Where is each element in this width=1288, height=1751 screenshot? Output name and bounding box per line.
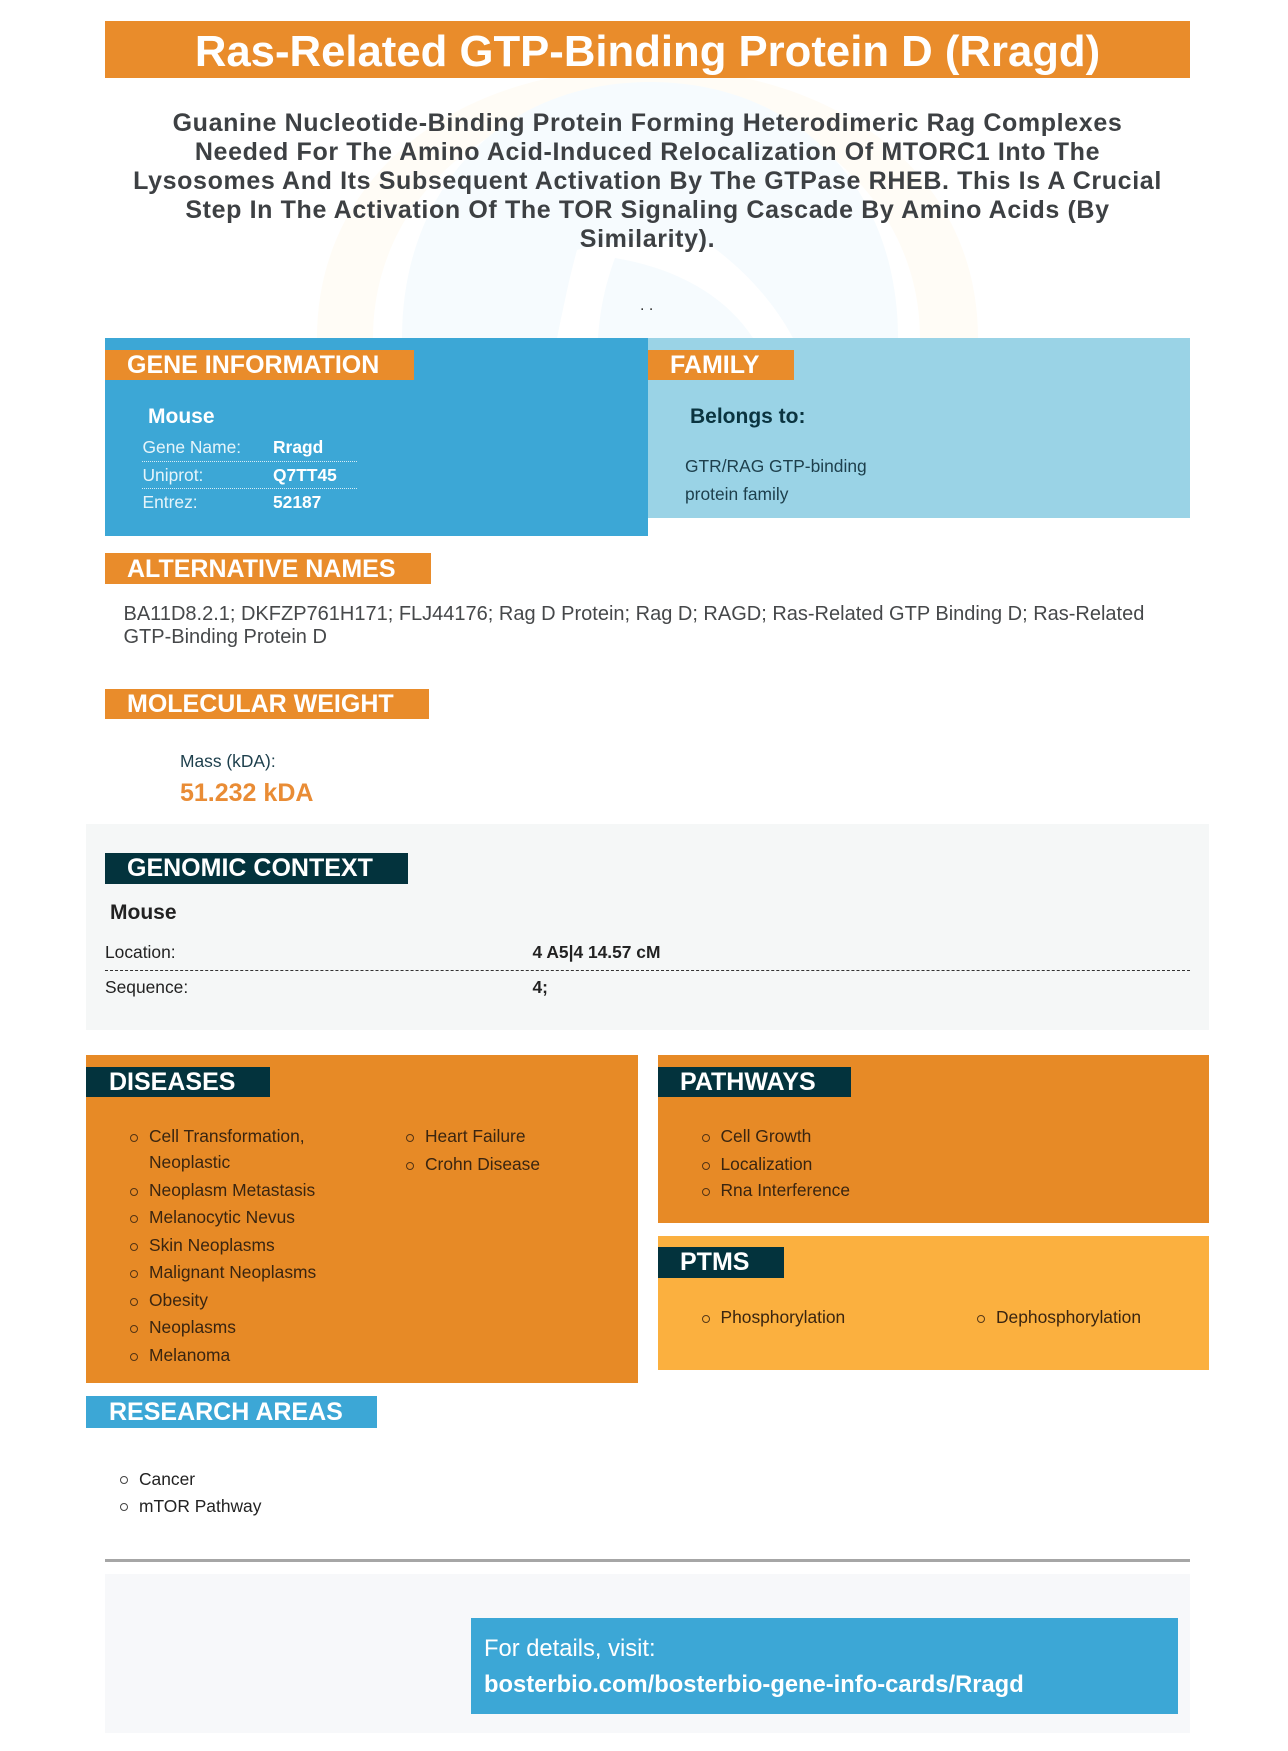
heading: diseases: DISEASES — [109, 1068, 235, 1096]
label: Uniprot: — [142, 465, 203, 485]
list item: Heart Failure — [425, 1126, 526, 1146]
belongs to label: Belongs to: — [690, 405, 806, 428]
subtitle description: Lysosomes And Its Subsequent Activation By The GTPase RHEB. This Is A Crucial — [133, 167, 1162, 195]
panel: genomic context — [86, 824, 1209, 1030]
panel: ptms — [658, 1236, 1209, 1370]
row: sequence — [105, 977, 548, 997]
ptm item: dephosphorylation: Dephosphorylation — [996, 1307, 1141, 1327]
heading: ptms — [658, 1247, 784, 1278]
list item: Skin Neoplasms — [149, 1235, 275, 1255]
family description — [685, 456, 867, 504]
list item: Cell Transformation, — [149, 1126, 305, 1146]
label: Gene Name: — [142, 437, 241, 457]
heading: ptms: PTMS — [680, 1248, 749, 1276]
list item: Neoplastic — [149, 1152, 230, 1172]
mass label: Mass (kDA): — [180, 751, 276, 771]
heading: pathways — [658, 1067, 851, 1097]
callout text: bosterbio.com/bosterbio-gene-info-cards/Rragd — [484, 1671, 1024, 1698]
subtitle description: Guanine Nucleotide-Binding Protein Forming Heterodimeric Rag Complexes — [173, 109, 1122, 137]
panel: pathways — [658, 1055, 1209, 1223]
subtitle description: Similarity). — [580, 225, 715, 253]
subtitle description — [133, 109, 1162, 253]
row: entrez — [142, 492, 321, 512]
footer rule — [105, 1559, 1190, 1562]
list item: Neoplasms — [149, 1317, 236, 1337]
callout: details link — [471, 1618, 1178, 1714]
ptm item: phosphorylation: Phosphorylation — [720, 1307, 845, 1327]
heading: diseases — [86, 1067, 270, 1097]
list item: Melanocytic Nevus — [149, 1207, 295, 1227]
alternative names text — [124, 603, 1144, 648]
heading: pathways: PATHWAYS — [680, 1068, 816, 1096]
list item: Rna Interference — [720, 1180, 850, 1200]
species: mouse: Mouse — [110, 901, 177, 924]
list item: Obesity — [149, 1290, 208, 1310]
family description: protein family — [685, 484, 788, 504]
value: 4 A5|4 14.57 cM — [532, 942, 660, 962]
heading: genomic context: GENOMIC CONTEXT — [127, 854, 373, 882]
heading: research areas: RESEARCH AREAS — [109, 1398, 343, 1426]
list item: Cell Growth — [720, 1126, 811, 1146]
label: Entrez: — [142, 492, 198, 512]
heading: family — [648, 350, 794, 380]
title: Ras-Related GTP-Binding Protein D (Rragd) — [195, 27, 1100, 76]
list item — [130, 1126, 305, 1172]
list item: Neoplasm Metastasis — [149, 1180, 315, 1200]
heading: alternative names: ALTERNATIVE NAMES — [127, 555, 396, 583]
alternative names text: GTP-Binding Protein D — [124, 626, 327, 648]
separator dots: . . — [640, 297, 653, 314]
heading: molecular weight: MOLECULAR WEIGHT — [127, 690, 394, 718]
panel: footer — [105, 1574, 1190, 1733]
list item: Localization — [720, 1154, 812, 1174]
panel: gene information — [105, 338, 648, 536]
family description: GTR/RAG GTP-binding — [685, 456, 867, 476]
row: uniprot — [142, 462, 357, 489]
alternative names text: BA11D8.2.1; DKFZP761H171; FLJ44176; Rag D Protein; Rag D; RAGD; Ras-Related GTP Binding D; Ras-Related — [124, 603, 1144, 625]
pathways list — [702, 1126, 850, 1200]
disease list: column 2 — [406, 1126, 540, 1174]
value: 4; — [532, 977, 548, 997]
list item: Melanoma — [149, 1345, 230, 1365]
mass value: 51.232 kDA — [180, 779, 313, 807]
research areas list — [120, 1469, 262, 1516]
callout text: For details, visit: — [484, 1635, 656, 1662]
list item: Cancer — [139, 1469, 195, 1489]
value: 52187 — [273, 492, 321, 512]
subtitle description: Needed For The Amino Acid-Induced Relocalization Of MTORC1 Into The — [195, 138, 1100, 166]
row: gene name — [142, 434, 357, 462]
heading: family: FAMILY — [670, 351, 759, 379]
subtitle description: Step In The Activation Of The TOR Signaling Cascade By Amino Acids (By — [185, 196, 1110, 224]
list item: mTOR Pathway — [139, 1496, 261, 1516]
callout text — [484, 1635, 1024, 1698]
row: location — [105, 936, 1190, 971]
disease list: column 1 — [130, 1126, 316, 1365]
label: Sequence: — [105, 977, 188, 997]
list item: Crohn Disease — [425, 1154, 540, 1174]
background watermark logo — [317, 78, 978, 338]
list item: Malignant Neoplasms — [149, 1262, 316, 1282]
value: Rragd — [273, 437, 323, 457]
panel: family — [648, 338, 1190, 518]
label: Location: — [105, 942, 176, 962]
heading: gene information: GENE INFORMATION — [127, 351, 379, 379]
panel: diseases — [86, 1055, 638, 1383]
species: mouse: Mouse — [148, 405, 215, 428]
value: Q7TT45 — [273, 465, 337, 485]
